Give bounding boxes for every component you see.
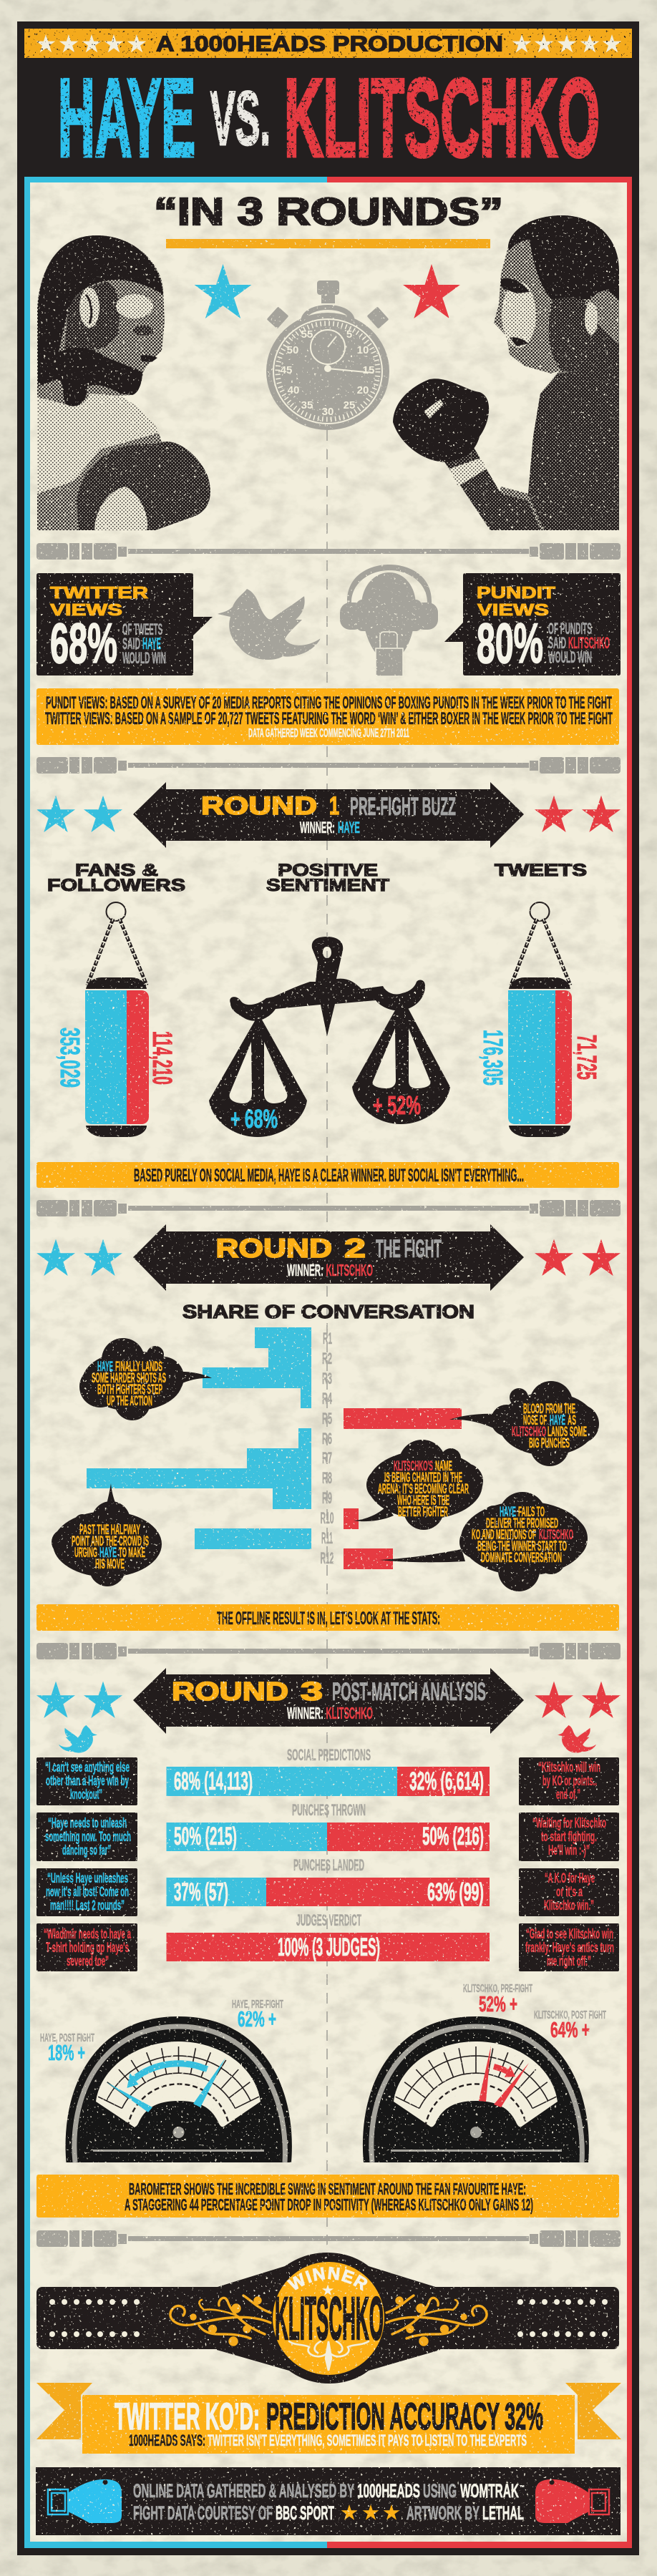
medallion [273, 2262, 384, 2375]
label: klitschko post fight [534, 2009, 606, 2042]
heading: positive sentiment [266, 861, 389, 895]
punching bag: fans and followers [54, 902, 177, 1137]
banner: round 2: WINNER: [287, 1261, 323, 1279]
chart: judges verdict [166, 1911, 490, 1961]
heading: PUNDIT [477, 583, 556, 602]
bar chart: share of conversation: R10 [321, 1509, 334, 1527]
speech cloud: round 8 comment: HAYE [99, 1545, 117, 1561]
quote 2: He'll win :-)” [548, 1843, 590, 1858]
speech cloud: round 5 comment: NOSE OF [523, 1413, 547, 1428]
scales: positive sentiment [209, 937, 450, 1137]
callout: round 2 [36, 1604, 619, 1631]
quote 4: “Wladimir needs to have a [44, 1927, 131, 1942]
speech cloud: round 10 comment: BETTER FIGHTER [398, 1504, 448, 1520]
round labels: R7 [322, 1449, 332, 1467]
speech cloud: round 8 comment: URGING [74, 1545, 97, 1561]
round labels: R8 [322, 1469, 332, 1487]
banner: round 1: PRE-FIGHT BUZZ [350, 793, 456, 821]
icon: stopwatch: 5 [346, 328, 352, 341]
chart: punches thrown [166, 1801, 490, 1851]
banner: round 2: THE FIGHT [376, 1235, 442, 1263]
speech cloud: round 3 comment: UP THE ACTION [107, 1393, 152, 1409]
stat caption [548, 620, 610, 666]
swing arrow [494, 2066, 515, 2077]
banner: round 3: KLITSCHKO [326, 1704, 373, 1722]
speech cloud: round 3 comment [79, 1338, 212, 1420]
banner: round 2: ROUND [216, 1234, 332, 1263]
banner: round 1 [133, 782, 524, 848]
label: haye pre-fight [232, 1999, 283, 2031]
icon: stopwatch: 50 [287, 344, 298, 356]
footer credits: WOMTRAK [460, 2480, 519, 2502]
heading: positive sentiment: POSITIVE [278, 861, 378, 880]
icon: stopwatch: 25 [344, 399, 355, 411]
icon: stopwatch: 45 [281, 364, 292, 376]
quote 4 [44, 1927, 131, 1969]
speech cloud: round 10 comment: KLITSCHKO'S [394, 1458, 433, 1474]
quote 3: Klitschko win.” [544, 1898, 594, 1913]
winner belt: KLITSCHKO [275, 2285, 384, 2352]
speech cloud: round 12 comment: DELIVER THE PROMISED [486, 1516, 558, 1531]
chart: punches landed: 37% (57) [174, 1878, 228, 1906]
heading: share of conversation: SHARE OF CONVERSATION [182, 1301, 474, 1322]
chart: punches landed: PUNCHES LANDED [293, 1856, 364, 1874]
icon: red glove [535, 2479, 609, 2523]
divider: barbell [36, 2230, 620, 2247]
heading: positive sentiment: SENTIMENT [266, 876, 389, 895]
icon: red bird [558, 1725, 596, 1753]
quote 3 [544, 1871, 595, 1913]
chart: social predictions: 68% (14,113) [174, 1767, 253, 1795]
round 1 stars [36, 796, 620, 832]
label: haye post fight: 18% + [48, 2040, 85, 2065]
speech cloud: round 10 comment [354, 1440, 483, 1530]
speech cloud: round 3 comment: SOME HARDER SHOTS AS [92, 1370, 166, 1386]
stars left [36, 34, 146, 52]
heading: TWITTER [50, 583, 148, 602]
icon: stopwatch: 55 [301, 328, 313, 341]
panel: twitter views: OF TWEETS [122, 620, 162, 638]
icon: stopwatch [266, 280, 389, 430]
icon: stopwatch: 15 [363, 364, 374, 376]
round labels [321, 1330, 334, 1567]
star [322, 2284, 334, 2296]
round labels: R9 [322, 1489, 332, 1507]
left pan [209, 1020, 307, 1137]
banner: round 2 [133, 1224, 524, 1291]
panel: twitter views: WOULD WIN [122, 649, 166, 667]
scales: positive sentiment: + 68% [230, 1104, 278, 1133]
footer credits: ™ [520, 2485, 525, 2490]
heading: fans and followers: FANS & [75, 861, 158, 880]
quote 4: T-shirt holding up Haye's [46, 1941, 129, 1956]
winner belt: WINNER [286, 2267, 368, 2291]
text: ARENA; IT'S BECOMING CLEAR [378, 1481, 469, 1497]
punching bag: tweets [477, 902, 601, 1137]
speech cloud: round 12 comment: HAYE [500, 1504, 516, 1520]
round labels: R5 [322, 1410, 332, 1428]
speech cloud: round 5 comment: KLITSCHKO [512, 1424, 546, 1440]
strap [36, 2287, 619, 2349]
stat caption: HAYE [142, 635, 161, 653]
line one: ONLINE DATA GATHERED & ANALYSED BY [133, 2480, 354, 2502]
fighter: klitschko [393, 215, 619, 530]
icon: blue bird [59, 1725, 97, 1753]
quote 1: “I can't see anything else [45, 1760, 130, 1775]
panel: twitter views [36, 573, 213, 675]
speech cloud: round 10 comment: NAME [435, 1458, 452, 1474]
needles [107, 2082, 152, 2112]
icon: stopwatch: 30 [322, 406, 334, 418]
klitschko tweets: “A K.O for Haye [545, 1871, 595, 1886]
ornament left [170, 2296, 271, 2345]
banner: round 2: KLITSCHKO [326, 1261, 373, 1279]
stat caption: WOULD WIN [548, 648, 592, 666]
panel: pundit views: VIEWS [477, 600, 549, 619]
banner: round 3: POST-MATCH ANALYSIS [332, 1678, 486, 1706]
chart: punches thrown: 50% (216) [422, 1823, 484, 1850]
gauge: haye barometer [66, 2016, 292, 2162]
ribbon: twitter ko'd [36, 2383, 621, 2454]
label: klitschko pre-fight [463, 1983, 532, 2016]
speech cloud: round 3 comment: FINALLY LANDS [115, 1359, 162, 1375]
stat caption: OF PUNDITS [548, 620, 592, 638]
banner: round 3: ROUND [172, 1677, 288, 1706]
main title: HAYE [58, 56, 195, 180]
stars right [512, 34, 621, 52]
label: haye pre-fight: HAYE, PRE-FIGHT [232, 1999, 283, 2011]
chart: punches thrown: PUNCHES THROWN [292, 1801, 366, 1819]
ornament white [289, 2341, 369, 2371]
quote 3: man!!!! Last 2 rounds” [50, 1898, 125, 1913]
star: klitschko [403, 264, 460, 318]
chart: punches landed [166, 1856, 490, 1906]
banner: round 3: WINNER: [287, 1704, 323, 1722]
quote 2: to start fighting. [541, 1830, 597, 1845]
speech cloud: round 5 comment: HAYE [550, 1413, 565, 1428]
value: haye: 353,029 [54, 1028, 84, 1088]
round labels: R6 [322, 1430, 332, 1448]
quote 1 [45, 1760, 130, 1802]
haye tweets [36, 1757, 137, 1971]
icon: blue glove [48, 2479, 122, 2523]
divider: barbell [36, 1200, 620, 1216]
bar chart: share of conversation: R11 [321, 1529, 333, 1547]
quote 1: end of.” [556, 1787, 580, 1802]
bar chart: share of conversation: R12 [321, 1549, 334, 1567]
divider: barbell [36, 543, 620, 560]
footer credits: ARTWORK BY [407, 2502, 480, 2524]
quote 1 [538, 1760, 600, 1802]
quote 2: something now. Too much [45, 1830, 131, 1845]
banner: round 1: ROUND [201, 792, 317, 820]
banner: round 3: 3 [301, 1677, 323, 1706]
speech cloud: round 5 comment: BLOOD FROM THE [523, 1401, 575, 1417]
heading: tweets: TWEETS [495, 861, 587, 880]
speech cloud: round 8 comment [52, 1483, 162, 1586]
fighter: haye [37, 235, 210, 530]
quote 4: severed toe” [67, 1954, 109, 1969]
line two: FIGHT DATA COURTESY OF [133, 2502, 273, 2524]
label: klitschko post fight: 64% + [550, 2017, 590, 2042]
quote 1: by KO or points.. [542, 1774, 597, 1789]
quote 4 [525, 1927, 614, 1969]
icon: stopwatch: 35 [301, 399, 313, 411]
swing arrow [127, 2064, 208, 2088]
quote 3: “Unless Haye unleashes [47, 1871, 128, 1886]
banner: round 3 [133, 1668, 524, 1734]
title strip: a 1000heads production [24, 29, 632, 58]
quote 3 [46, 1871, 129, 1913]
callout: round 1 [36, 1162, 619, 1188]
quote 2 [45, 1816, 131, 1858]
stat caption: SAID [548, 634, 566, 652]
speech cloud: round 12 comment: FAILS TO [518, 1504, 545, 1520]
label: klitschko pre-fight: KLITSCHKO, PRE-FIGHT [463, 1983, 532, 1995]
footer credits: BBC SPORT [276, 2502, 334, 2524]
value: klitschko: 114,210 [147, 1031, 177, 1085]
round labels: R4 [322, 1390, 332, 1407]
label: haye post fight: HAYE, POST FIGHT [40, 2032, 94, 2044]
stat 68%: 68% [50, 611, 117, 675]
star: haye [195, 264, 251, 318]
bar chart: share of conversation [87, 1327, 462, 1569]
ornament right [386, 2296, 487, 2345]
divider: barbell [36, 757, 620, 774]
chart: social predictions: SOCIAL PREDICTIONS [287, 1746, 371, 1764]
icon: stopwatch: 10 [357, 344, 369, 356]
quote 4: me right off.” [547, 1954, 591, 1969]
icon: stopwatch: 40 [288, 384, 299, 396]
speech cloud: round 12 comment: KO AND MENTIONS OF [472, 1527, 536, 1543]
heading: fans and followers: FOLLOWERS [47, 876, 185, 895]
value: haye: 176,305 [477, 1030, 507, 1085]
winner arc text [290, 2279, 367, 2294]
footer credits: LETHAL [482, 2502, 524, 2524]
icon: pundit with headphones [340, 565, 438, 676]
speech cloud: round 5 comment: AS [568, 1413, 576, 1428]
label: haye post fight [40, 2032, 94, 2065]
gauge: klitschko barometer [363, 2016, 589, 2162]
banner: round 1: WINNER: [300, 819, 335, 836]
speech cloud: round 8 comment: TO MAKE [119, 1545, 145, 1561]
heading: fans and followers [47, 861, 185, 895]
klitschko tweets [519, 1757, 619, 1971]
production text: A 1000HEADS PRODUCTION [156, 31, 503, 56]
stat 80%: 80% [477, 611, 543, 675]
round labels: R3 [322, 1370, 332, 1387]
needles [479, 2046, 491, 2102]
quote 3: or it's a [556, 1885, 583, 1900]
panel: pundit views [444, 573, 620, 675]
quote 1: knockout” [70, 1787, 102, 1802]
speech cloud: round 3 comment: HAYE [97, 1359, 113, 1375]
speech cloud: round 12 comment: KLITSCHKO [539, 1527, 573, 1543]
winner belt [36, 2253, 619, 2384]
in 3 rounds heading: “IN 3 ROUNDS” [154, 190, 503, 233]
stud dots [49, 2299, 608, 2337]
chart: punches landed: 63% (99) [427, 1878, 484, 1906]
panel: twitter views: VIEWS [50, 600, 122, 619]
callout: methodology: DATA GATHERED WEEK COMMENCING JUNE 27TH 2011 [248, 726, 409, 740]
chart: judges verdict: 100% (3 JUDGES) [278, 1933, 380, 1961]
divider: barbell [36, 1643, 620, 1659]
chart: social predictions [166, 1746, 490, 1796]
label: haye pre-fight: 62% + [238, 2006, 276, 2031]
round 3 stars [36, 1682, 620, 1718]
speech cloud: round 10 comment: IS BEING CHANTED IN THE [384, 1470, 462, 1485]
quote 2 [532, 1816, 606, 1858]
main title: VS. [210, 75, 271, 161]
quote 2: dancing so far” [62, 1843, 111, 1858]
stat caption [122, 620, 166, 667]
stars [341, 2504, 399, 2520]
callout: barometer [36, 2175, 619, 2218]
footer credits: USING [423, 2480, 457, 2502]
quote 3: now it's all lost! Come on [46, 1885, 129, 1900]
speech cloud: round 8 comment: PAST THE HALFWAY [79, 1522, 140, 1538]
chart: punches thrown: 50% (215) [174, 1823, 237, 1850]
banner: round 1: HAYE [338, 819, 360, 836]
speech cloud: round 10 comment: WHO HERE IS THE [397, 1493, 449, 1508]
quote 1: other than a Haye win by [46, 1774, 129, 1789]
speech cloud: round 5 comment [449, 1381, 599, 1466]
chart: judges verdict: JUDGES VERDICT [296, 1911, 361, 1929]
centre dashed line [326, 430, 328, 2254]
round 2 stars [36, 1239, 620, 1276]
centre plate [217, 2253, 440, 2384]
icon: twitter bird [218, 589, 321, 660]
banner: round 1: 1 [329, 792, 339, 820]
stat caption: SAID [122, 635, 140, 653]
callout: methodology [36, 688, 619, 745]
text: POINT AND THE CROWD IS [72, 1533, 149, 1549]
chart: social predictions: 32% (6,614) [409, 1767, 484, 1795]
label: klitschko pre-fight: 52% + [479, 1991, 517, 2016]
speech cloud: round 3 comment: BOTH FIGHTERS STEP [97, 1382, 162, 1397]
scales: positive sentiment: + 52% [373, 1091, 421, 1120]
subline: 1000HEADS SAYS: [129, 2431, 205, 2449]
right pan [352, 1004, 450, 1124]
speech cloud: round 8 comment: HIS MOVE [95, 1556, 125, 1572]
quote 2: “Haye needs to unleash [48, 1816, 127, 1831]
footer credits: 1000HEADS [357, 2480, 420, 2502]
banner: round 2: 2 [344, 1234, 366, 1263]
main title [58, 56, 600, 180]
round labels: R2 [322, 1350, 332, 1367]
speech cloud: round 5 comment: BIG PUNCHES [529, 1435, 570, 1451]
value: klitschko: 71,725 [571, 1035, 601, 1080]
speech cloud: round 5 comment: LANDS SOME [548, 1424, 587, 1440]
headline: TWITTER KO’D: [115, 2396, 260, 2438]
quote 1: “Klitschko will win [538, 1760, 600, 1775]
speech cloud: round 12 comment [379, 1492, 588, 1591]
icon: stopwatch: 20 [357, 384, 369, 396]
round labels: R1 [323, 1330, 332, 1347]
footer credits [36, 2467, 620, 2535]
